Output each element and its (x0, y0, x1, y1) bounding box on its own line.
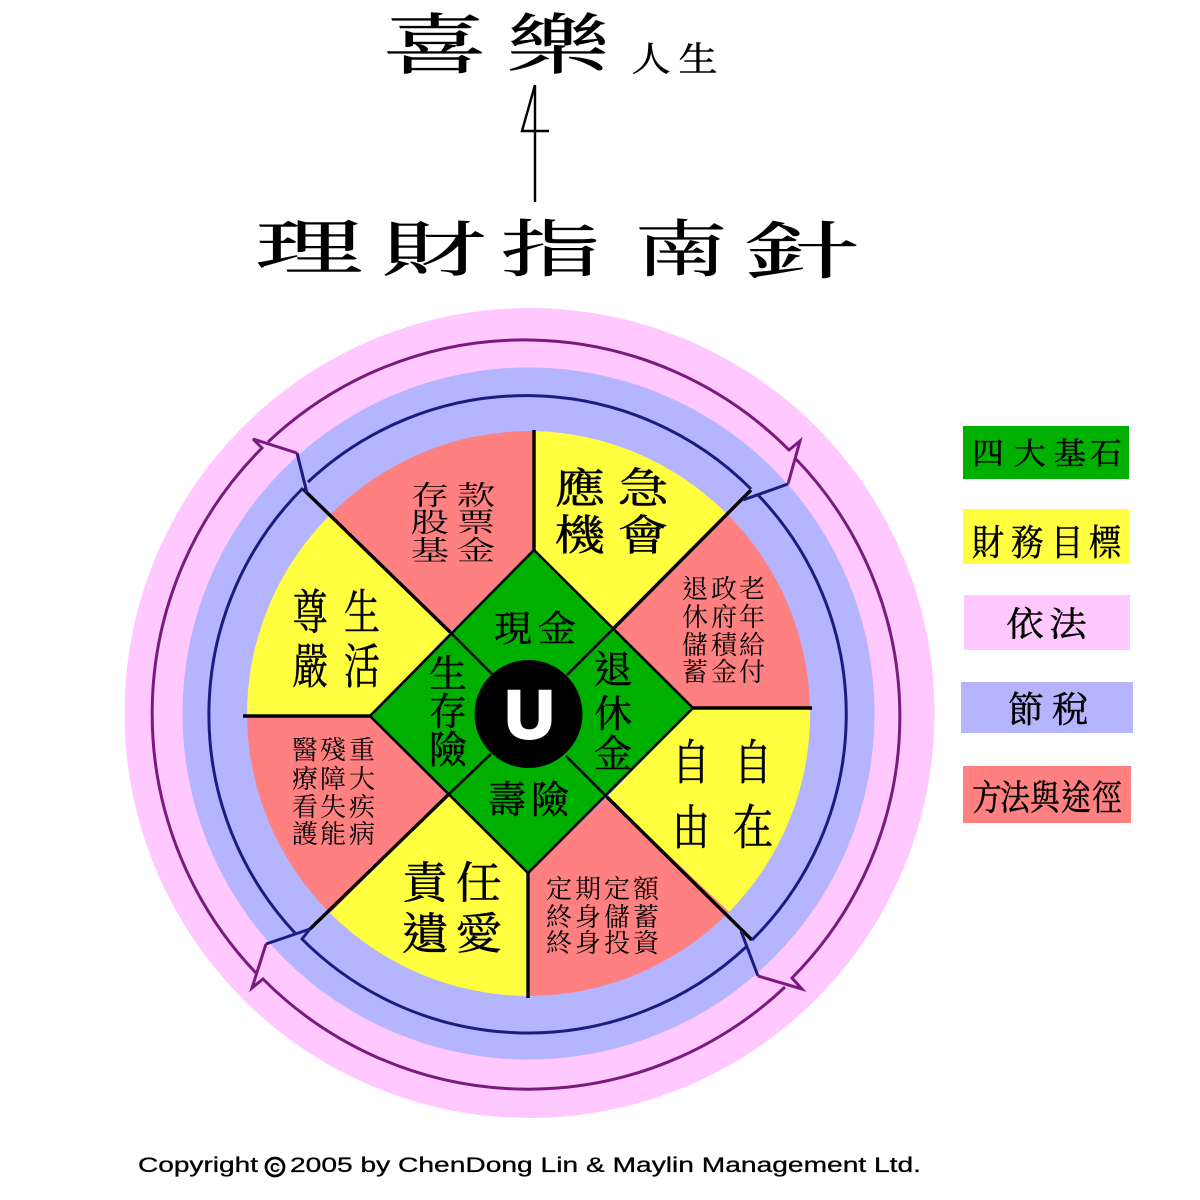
legend item: 四大基石 (963, 426, 1129, 479)
legend item: 節稅 (961, 682, 1133, 733)
text: 生活尊嚴 (292, 587, 380, 694)
text: 退休金 (594, 650, 632, 776)
text: 生存險: 存 (429, 692, 467, 734)
text: 退休金: 退 (594, 650, 632, 692)
text: 自由自在: 在 (733, 801, 773, 855)
text: 自由自在 (672, 738, 773, 855)
text: 自由自在: 由 (672, 803, 710, 855)
text: 存款股票基金: 股 (411, 508, 449, 539)
text: 生存險: 生 (429, 654, 467, 696)
text: 重大疾病 殘障失能 醫療看護 (292, 736, 375, 849)
legend item: 四大基石: 四 (972, 438, 1004, 471)
compass wheel (124, 308, 934, 1118)
legend item: 四大基石: 大 (1014, 438, 1046, 471)
text: 應急機會: 急 (618, 467, 670, 513)
text: 存款股票基金 (411, 481, 495, 567)
legend item: 四大基石: 石 (1090, 438, 1122, 471)
sector: left yellow (247, 515, 450, 716)
text: 退休金: 金 (594, 734, 632, 776)
text: 重大疾病 殘障失能 醫療看護: 療障大 (292, 765, 375, 794)
sector: left red (247, 716, 448, 913)
legend item: 財務目標: 務 (1011, 523, 1043, 563)
text: 存款股票基金: 款 (457, 481, 495, 512)
text: 生活尊嚴: 活 (344, 641, 380, 694)
text: 現金: 金 (538, 609, 576, 649)
text: 存款股票基金: 基 (411, 536, 449, 567)
title: 理財指南針 (255, 215, 859, 286)
sector: right red (613, 513, 810, 708)
ring: 依法 outer pink (124, 308, 934, 1118)
legend item: 依法: 依 (1006, 606, 1044, 644)
title: 理財指南針: 理 (255, 215, 363, 282)
text: 定期定額 終身儲蓄 終身投資 (546, 875, 660, 958)
text: 存款股票基金: 票 (457, 508, 495, 539)
title: 理財指南針: 指 (499, 217, 601, 285)
legend item: 四大基石: 基 (1054, 438, 1086, 471)
text: 退休金: 休 (594, 694, 632, 736)
sector: bottom yellow (330, 795, 528, 996)
legend item: 方法與途徑 (963, 766, 1131, 823)
text: 壽險: 壽 (488, 780, 526, 822)
text: 生存險 (429, 654, 467, 772)
title: 喜樂人生: 樂 (507, 9, 610, 83)
text: 退休儲蓄 政府積金 老年給付 (682, 575, 765, 687)
text: 自由自在: 自 (734, 738, 772, 790)
text: 壽險 (488, 780, 569, 822)
navy arcs and arrows (209, 396, 846, 1033)
text: 退休儲蓄 政府積金 老年給付: 退政老 (682, 575, 765, 604)
spokes: black dividers (243, 430, 812, 998)
text: 現金: 現 (494, 609, 532, 649)
legend item: 方法與途徑: 徑 (1092, 779, 1122, 819)
text: 責任遺愛: 責 (402, 859, 450, 908)
text: 責任遺愛: 遺 (402, 910, 449, 959)
legend item: 依法: 法 (1049, 606, 1088, 644)
text: 責任遺愛 (402, 859, 502, 959)
title: 喜樂人生: 人 (631, 40, 671, 78)
legend item: 方法與途徑: 方 (972, 779, 1002, 819)
text: 應急機會: 機 (555, 514, 606, 560)
copyright footer (138, 1154, 921, 1177)
text: 重大疾病 殘障失能 醫療看護: 看失疾 (292, 793, 375, 822)
legend item: 財務目標: 目 (1051, 523, 1083, 563)
text: 生活尊嚴: 生 (344, 587, 380, 640)
diamond: green four cornerstones (370, 550, 693, 873)
purple arcs and arrows (152, 340, 900, 1089)
legend item: 依法 (964, 595, 1130, 650)
text: 生活尊嚴: 嚴 (292, 641, 328, 694)
text: 生存險: 險 (429, 730, 467, 772)
sector: top-right yellow (534, 431, 726, 629)
legend item: 財務目標: 標 (1089, 523, 1122, 563)
copyright footer: C (270, 1160, 280, 1175)
legend (961, 426, 1133, 823)
legend item: 方法與途徑: 途 (1061, 779, 1092, 819)
title: 理財指南針: 南 (635, 217, 727, 285)
text: 應急機會: 會 (618, 514, 668, 560)
sector: top red (330, 431, 534, 632)
title: 理財指南針: 財 (382, 218, 486, 284)
text: 定期定額 終身儲蓄 終身投資: 定期定額 (546, 875, 660, 904)
title: 理財指南針: 針 (745, 218, 859, 286)
legend item: 方法與途徑: 與 (1030, 779, 1061, 819)
text: 應急機會 (555, 467, 670, 560)
sector: lower-right yellow (607, 708, 810, 912)
text: 壽險: 險 (531, 780, 569, 822)
text: 責任遺愛: 愛 (456, 910, 502, 959)
text: 存款股票基金: 金 (457, 536, 495, 567)
title: 喜樂人生 (382, 9, 718, 83)
text: 退休儲蓄 政府積金 老年給付: 儲積給 (682, 631, 765, 660)
text: 現金 (494, 609, 576, 649)
text: 定期定額 終身儲蓄 終身投資: 終身投資 (546, 929, 660, 958)
copyright footer: 2005 by ChenDong Lin & Maylin Management Ltd. (290, 1154, 921, 1177)
copyright footer: Copyright (138, 1154, 258, 1177)
text: 自由自在: 自 (672, 738, 710, 790)
title: 喜樂人生: 生 (678, 40, 718, 78)
sector: bottom red (528, 797, 729, 996)
legend item: 方法與途徑: 法 (1000, 779, 1030, 819)
text: 重大疾病 殘障失能 醫療看護: 護能病 (292, 820, 375, 849)
text: 退休儲蓄 政府積金 老年給付: 休府年 (682, 603, 765, 632)
title: 喜樂人生: 喜 (382, 10, 488, 83)
text: 存款股票基金: 存 (411, 481, 449, 512)
icon: compass needle arrow (522, 85, 549, 202)
text: 退休儲蓄 政府積金 老年給付: 蓄金付 (682, 658, 765, 687)
ring: 節稅 blue (182, 368, 874, 1060)
center circle: U: U (505, 677, 554, 753)
center circle: U (474, 660, 582, 768)
text: 生活尊嚴: 尊 (292, 587, 328, 640)
text: 定期定額 終身儲蓄 終身投資: 終身儲蓄 (546, 903, 659, 932)
text: 應急機會: 應 (555, 467, 607, 513)
text: 責任遺愛: 任 (456, 859, 502, 908)
legend item: 財務目標: 財 (972, 523, 1004, 563)
legend item: 財務目標 (963, 509, 1129, 564)
legend item: 節稅: 節稅 (1008, 690, 1089, 730)
text: 重大疾病 殘障失能 醫療看護: 醫殘重 (292, 736, 375, 765)
